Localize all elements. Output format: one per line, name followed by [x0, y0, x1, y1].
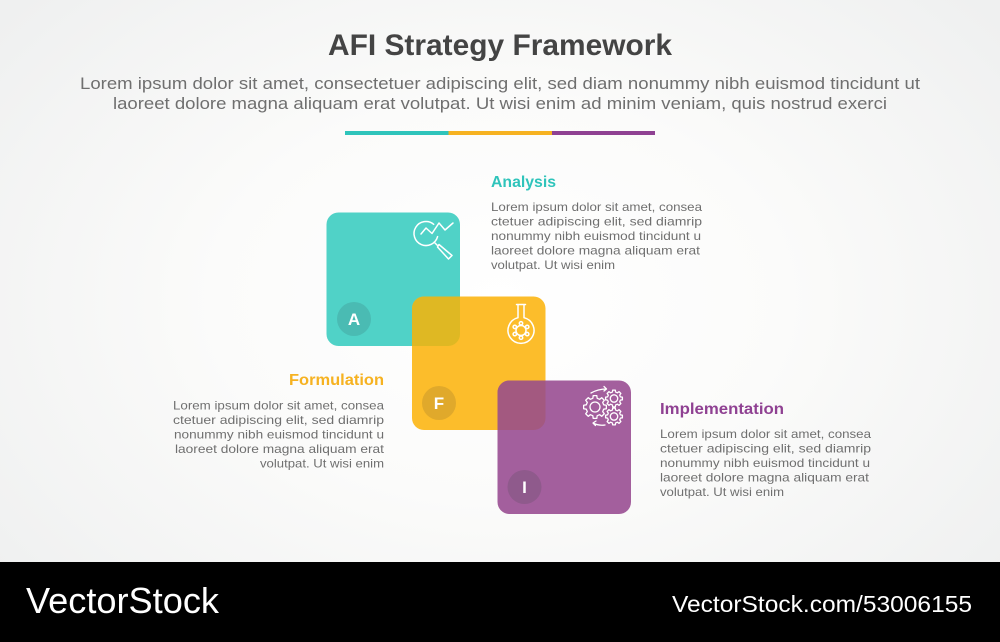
text block: analysis — [491, 174, 702, 272]
heading: implementation: Implementation — [660, 401, 784, 418]
overlap: formulation and implementation — [498, 380, 546, 430]
panel: formulation square — [412, 296, 546, 430]
body: analysis: laoreet dolore magna aliquam erat — [491, 244, 701, 258]
body: formulation — [173, 398, 385, 470]
body: formulation: ctetuer adipiscing elit, sed diamrip — [173, 413, 384, 427]
icon: flask — [508, 304, 534, 343]
overlap: analysis and formulation — [412, 296, 460, 346]
badge: I: I — [522, 478, 527, 497]
body: implementation — [660, 427, 871, 499]
body: implementation: ctetuer adipiscing elit, sed diamrip — [660, 442, 871, 456]
panel: analysis square — [326, 212, 460, 346]
body: analysis: nonummy nibh euismod tincidunt u — [491, 229, 701, 243]
title: AFI Strategy Framework — [328, 29, 672, 62]
body: formulation: Lorem ipsum dolor sit amet, consea — [173, 398, 384, 412]
badge: A: A — [348, 310, 360, 329]
text block: implementation — [660, 401, 871, 499]
subtitle text block — [80, 74, 920, 113]
body: implementation: Lorem ipsum dolor sit amet, consea — [660, 427, 871, 441]
body: formulation: volutpat. Ut wisi enim — [260, 456, 384, 470]
body: analysis — [491, 200, 702, 272]
icon: gears with arrows — [584, 386, 622, 426]
heading: formulation: Formulation — [289, 372, 384, 389]
body: implementation: laoreet dolore magna aliquam erat — [660, 470, 870, 484]
footer logo text: VectorStock — [26, 580, 220, 621]
body: analysis: volutpat. Ut wisi enim — [491, 258, 615, 272]
tricolor divider — [345, 131, 655, 135]
subtitle text block: laoreet dolore magna aliquam erat volutpat. Ut wisi enim ad minim veniam, quis nostrud exerci — [113, 94, 887, 113]
body: implementation: nonummy nibh euismod tincidunt u — [660, 456, 870, 470]
body: formulation: nonummy nibh euismod tincidunt u — [174, 428, 384, 442]
body: implementation: volutpat. Ut wisi enim — [660, 485, 784, 499]
badge: F: F — [434, 394, 444, 413]
body: analysis: ctetuer adipiscing elit, sed diamrip — [491, 214, 702, 228]
text block: formulation — [173, 372, 385, 470]
icon: analysis magnifier chart — [414, 222, 453, 259]
panel: implementation square — [498, 380, 631, 514]
body: formulation: laoreet dolore magna aliquam erat — [175, 442, 385, 456]
footer band — [0, 562, 1000, 642]
heading: analysis: Analysis — [491, 174, 556, 191]
footer url text: VectorStock.com/53006155 — [672, 591, 972, 617]
body: analysis: Lorem ipsum dolor sit amet, consea — [491, 200, 702, 214]
subtitle text block: Lorem ipsum dolor sit amet, consectetuer adipiscing elit, sed diam nonummy nibh euismod tincidunt ut — [80, 74, 920, 93]
